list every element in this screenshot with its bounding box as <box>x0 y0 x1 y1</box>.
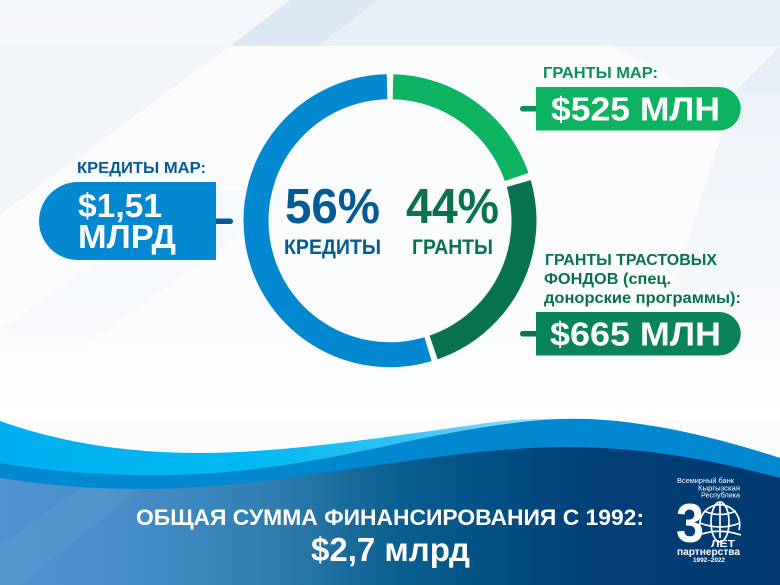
value: $525 МЛН <box>551 90 720 128</box>
logo: 30 years of partnership: Республика <box>701 492 740 500</box>
segment: IDA grants <box>393 87 517 177</box>
total financing text <box>136 505 644 568</box>
callout: trust fund grants <box>520 252 741 356</box>
donut chart <box>256 87 524 355</box>
value pill <box>536 312 741 356</box>
value: $665 МЛН <box>550 316 721 352</box>
logo: 30 years of partnership: ЛЕТ <box>711 539 735 550</box>
value pill <box>39 182 216 260</box>
stat: 44% grants: 44% <box>406 180 499 234</box>
wave: bottom banner <box>0 419 780 585</box>
total financing text: ОБЩАЯ СУММА ФИНАНСИРОВАНИЯ С 1992: <box>136 505 644 530</box>
logo: 30 years of partnership: Всемирный банк <box>677 477 735 485</box>
value pill <box>536 87 741 130</box>
total financing text: $2,7 млрд <box>311 531 470 568</box>
connector <box>520 106 540 112</box>
label: КРЕДИТЫ МАР: <box>77 160 206 177</box>
connector <box>520 331 540 336</box>
label: ГРАНТЫ МАР: <box>543 65 658 82</box>
logo: 30 years of partnership <box>676 477 741 564</box>
stat: 56% credits <box>284 180 381 259</box>
logo: 30 years of partnership: Кыргызская <box>698 486 740 492</box>
stat: 44% grants <box>406 180 499 259</box>
logo: 30 years of partnership: партнерства <box>677 547 740 558</box>
connector <box>212 218 233 224</box>
value: МЛРД <box>78 218 176 255</box>
label: донорские программы): <box>544 290 741 307</box>
globe icon <box>700 502 741 542</box>
segment: credits 56% <box>256 87 428 355</box>
value: $1,51 <box>78 187 162 224</box>
callout: IDA credits <box>39 160 233 260</box>
stat: 56% credits: КРЕДИТЫ <box>284 236 381 259</box>
numeral 3: 3 <box>676 492 704 554</box>
label: ГРАНТЫ ТРАСТОВЫХ <box>545 252 717 269</box>
stat: 56% credits: 56% <box>285 180 380 234</box>
logo: 30 years of partnership: 1992–2022 <box>693 558 726 564</box>
label: ФОНДОВ (спец. <box>544 271 671 288</box>
segment: trust fund grants <box>434 184 524 347</box>
callout: IDA grants <box>520 65 741 130</box>
stat: 44% grants: ГРАНТЫ <box>412 236 493 259</box>
